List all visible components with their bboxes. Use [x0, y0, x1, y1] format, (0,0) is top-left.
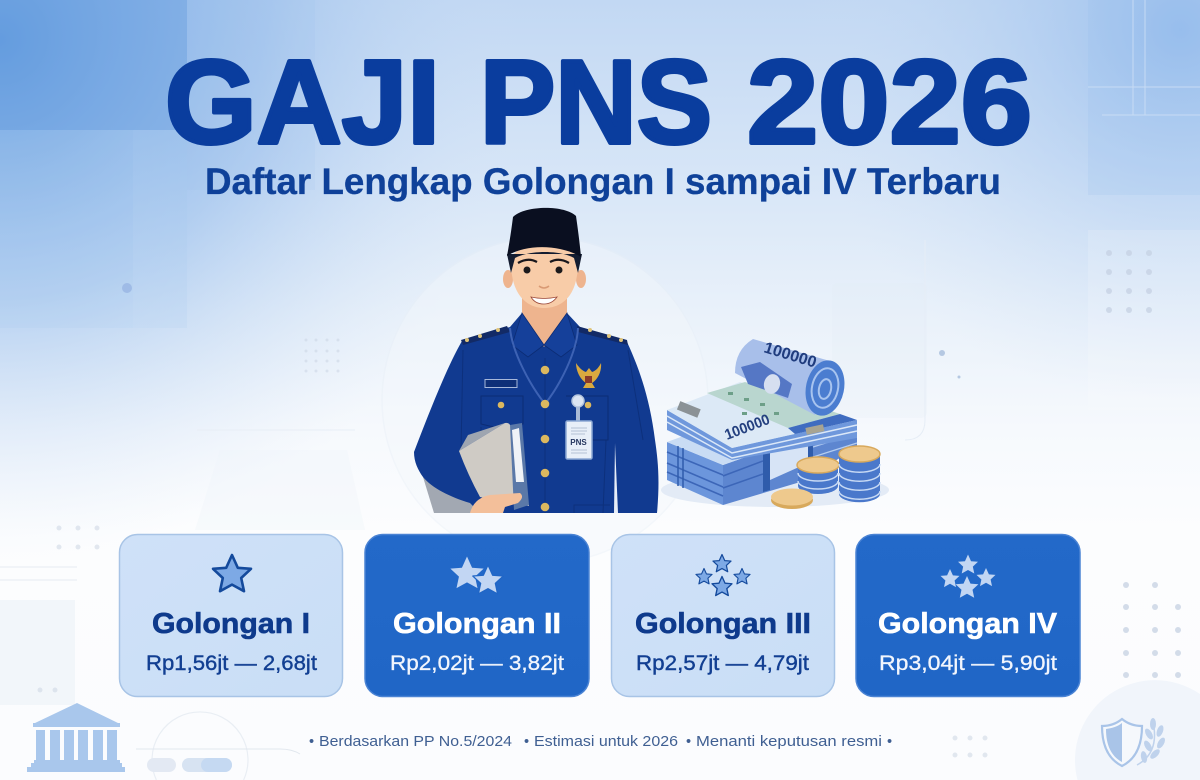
salary range: Rp3,04jt — 5,90jt	[879, 652, 1057, 675]
icon: government building	[27, 703, 125, 772]
illustration: money and coins	[661, 339, 889, 509]
epaulettes	[461, 326, 628, 345]
footer note: Estimasi untuk 2026	[534, 734, 678, 750]
smile	[531, 297, 557, 304]
footer note: Berdasarkan PP No.5/2024	[319, 734, 512, 750]
garuda emblem	[576, 363, 601, 388]
heading: Golongan I	[152, 608, 310, 640]
sleeve gap highlight	[614, 443, 618, 513]
neck	[522, 296, 567, 347]
face	[511, 246, 578, 308]
subtitle: Daftar Lengkap Golongan I sampai IV Terbaru	[205, 161, 1001, 202]
hand	[470, 493, 522, 513]
coin stack small	[797, 457, 839, 494]
hair	[507, 252, 582, 273]
icon: shield with laurel	[1102, 718, 1167, 766]
panel: Golongan IV	[856, 534, 1080, 696]
decorative pills	[147, 758, 232, 772]
name plate	[485, 380, 517, 388]
footer note: •	[524, 734, 529, 750]
icon: two stars	[450, 556, 503, 594]
illustration: civil servant in uniform	[414, 208, 658, 513]
icon: four stars	[696, 554, 750, 596]
upper banknote stack: 100000	[722, 411, 772, 444]
rolled banknote: 100000	[762, 340, 819, 372]
footer note: •	[309, 734, 314, 750]
lanyard	[510, 328, 578, 404]
single gold coin	[771, 488, 813, 509]
footer note: •	[686, 734, 691, 750]
title	[165, 36, 1032, 169]
folder back sheet	[423, 477, 490, 513]
pockets	[481, 396, 608, 440]
salary range: Rp2,57jt — 4,79jt	[636, 652, 809, 675]
title: 2026	[747, 36, 1032, 169]
title: GAJI	[165, 36, 440, 169]
folder	[459, 423, 529, 510]
salary range: Rp2,02jt — 3,82jt	[390, 652, 564, 675]
footer note: •	[887, 734, 892, 750]
jacket shading	[461, 350, 643, 513]
salary range: Rp1,56jt — 2,68jt	[146, 652, 317, 675]
eyes and brows	[518, 260, 569, 288]
panel: Golongan II	[365, 534, 589, 696]
heading: Golongan II	[393, 608, 561, 640]
upper banknote stack	[667, 382, 857, 460]
heading: Golongan IV	[878, 608, 1058, 640]
title: PNS	[480, 36, 712, 169]
heading: Golongan III	[635, 608, 811, 640]
icon: one star	[213, 555, 251, 591]
icon: four stars	[940, 554, 996, 598]
buttons	[498, 366, 591, 511]
ground shadow	[661, 473, 889, 507]
jacket	[414, 313, 658, 513]
ID badge	[566, 395, 592, 459]
panel: Golongan I	[120, 534, 342, 696]
coin stack tall	[839, 446, 880, 502]
peci hat	[507, 208, 581, 257]
rolled banknote	[735, 339, 849, 419]
panel: Golongan III	[612, 534, 834, 696]
ID badge: PNS	[570, 438, 587, 447]
lower banknote stack	[667, 430, 857, 505]
ears	[503, 270, 586, 288]
collars	[512, 313, 577, 357]
footer note: Menanti keputusan resmi	[696, 734, 882, 750]
